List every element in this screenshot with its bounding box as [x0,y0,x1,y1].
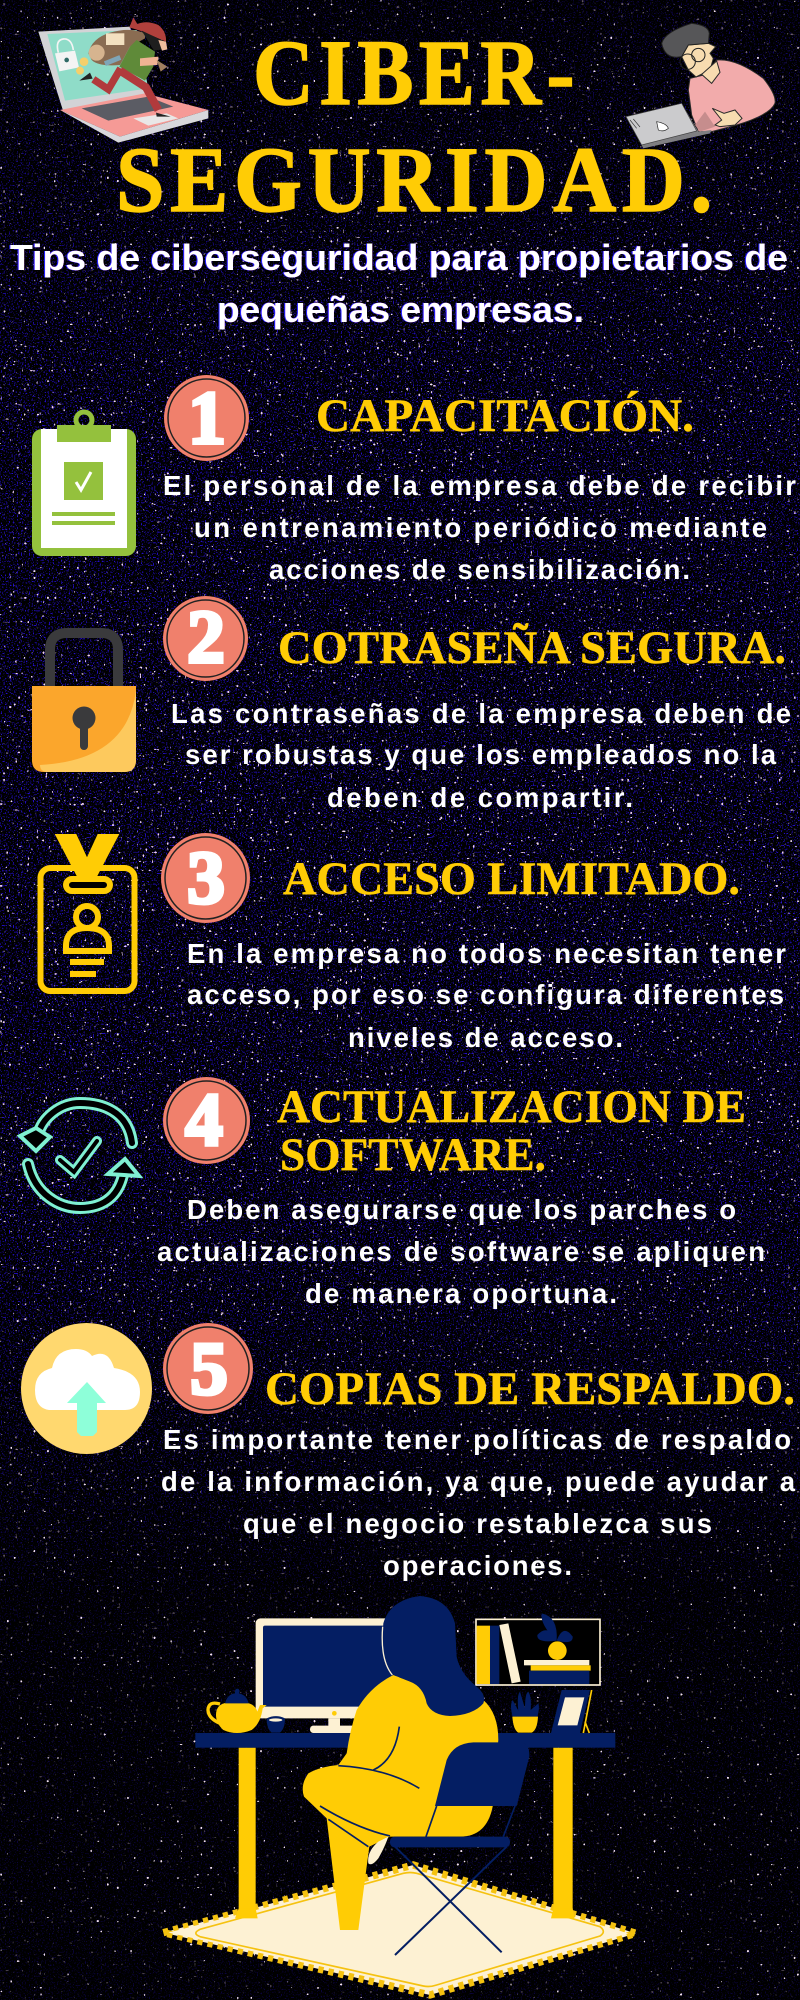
text 5: de la información, ya que, puede ayudar a [161,1466,796,1497]
text 4: actualizaciones de software se apliquen [157,1236,765,1267]
icon: cloud upload [21,1323,152,1454]
heading 4: ACTUALIZACION DE [277,1081,746,1133]
text 4 [157,1194,765,1309]
icon: id badge [40,836,134,991]
badge 4: 4 [185,1079,223,1162]
text 3: En la empresa no todos necesitan tener [187,938,786,969]
text 2: deben de compartir. [327,782,633,813]
desk [195,1733,615,1918]
icon: padlock [32,633,136,772]
shelf with books and plant [476,1613,600,1685]
badge 1 [164,375,249,461]
icon: clipboard [32,412,136,556]
icon: person with laptop [626,23,775,148]
badge 2 [163,596,248,681]
rug [163,1865,636,1995]
panel: tip 1 capacitación [32,375,796,585]
subtitle: Tips de ciberseguridad para propietarios de [10,237,788,278]
heading 3: ACCESO LIMITADO. [283,853,740,905]
chair [390,1742,529,1847]
badge 5: 5 [190,1328,228,1411]
heading 5: COPIAS DE RESPALDO. [265,1363,795,1415]
text 2 [171,698,791,813]
text 4: de manera oportuna. [305,1278,617,1309]
badge 5 [163,1323,253,1414]
text 3: acceso, por eso se configura diferentes [187,979,784,1010]
text 1: acciones de sensibilización. [269,554,690,585]
text 3 [187,938,786,1053]
text 1: un entrenamiento periódico mediante [194,512,767,543]
illustration: woman working at desk on rug [163,1596,636,1995]
panel: tip 3 acceso [40,833,786,1053]
title [116,22,718,232]
text 5 [161,1424,796,1581]
title: CIBER- [253,22,580,125]
chair back legs [392,1843,507,1955]
panel: tip 4 actualización [20,1077,765,1309]
heading 1: CAPACITACIÓN. [316,390,694,442]
badge 2: 2 [187,596,225,679]
subtitle: pequeñas empresas. [217,289,584,330]
badge 3 [161,833,250,923]
text 1: El personal de la empresa debe de recibir [163,470,796,501]
panel: tip 2 contraseña [32,596,791,813]
text 2: Las contraseñas de la empresa deben de [171,698,791,729]
panel: tip 5 copias [21,1323,796,1581]
heading 4 [277,1081,746,1181]
text 3: niveles de acceso. [348,1022,623,1053]
heading 2: COTRASEÑA SEGURA. [278,622,786,674]
text 5: Es importante tener políticas de respaldo [163,1424,791,1455]
icon: sync check [20,1103,139,1208]
badge 1: 1 [188,377,226,460]
text 5: que el negocio restablezca sus [243,1508,712,1539]
text 1 [163,470,796,585]
potted plant [511,1692,539,1733]
badge 3: 3 [187,837,225,920]
heading 4: SOFTWARE. [280,1129,546,1181]
icon: thief leaving a laptop [38,17,208,143]
monitor [256,1618,399,1733]
woman [303,1596,498,1947]
title: SEGURIDAD. [116,129,718,232]
picture frame [551,1690,592,1733]
subtitle [10,237,788,330]
badge 4 [163,1077,250,1164]
teapot and cup [208,1689,285,1733]
text 2: ser robustas y que los empleados no la [185,739,777,770]
text 4: Deben asegurarse que los parches o [187,1194,736,1225]
text 5: operaciones. [383,1550,572,1581]
